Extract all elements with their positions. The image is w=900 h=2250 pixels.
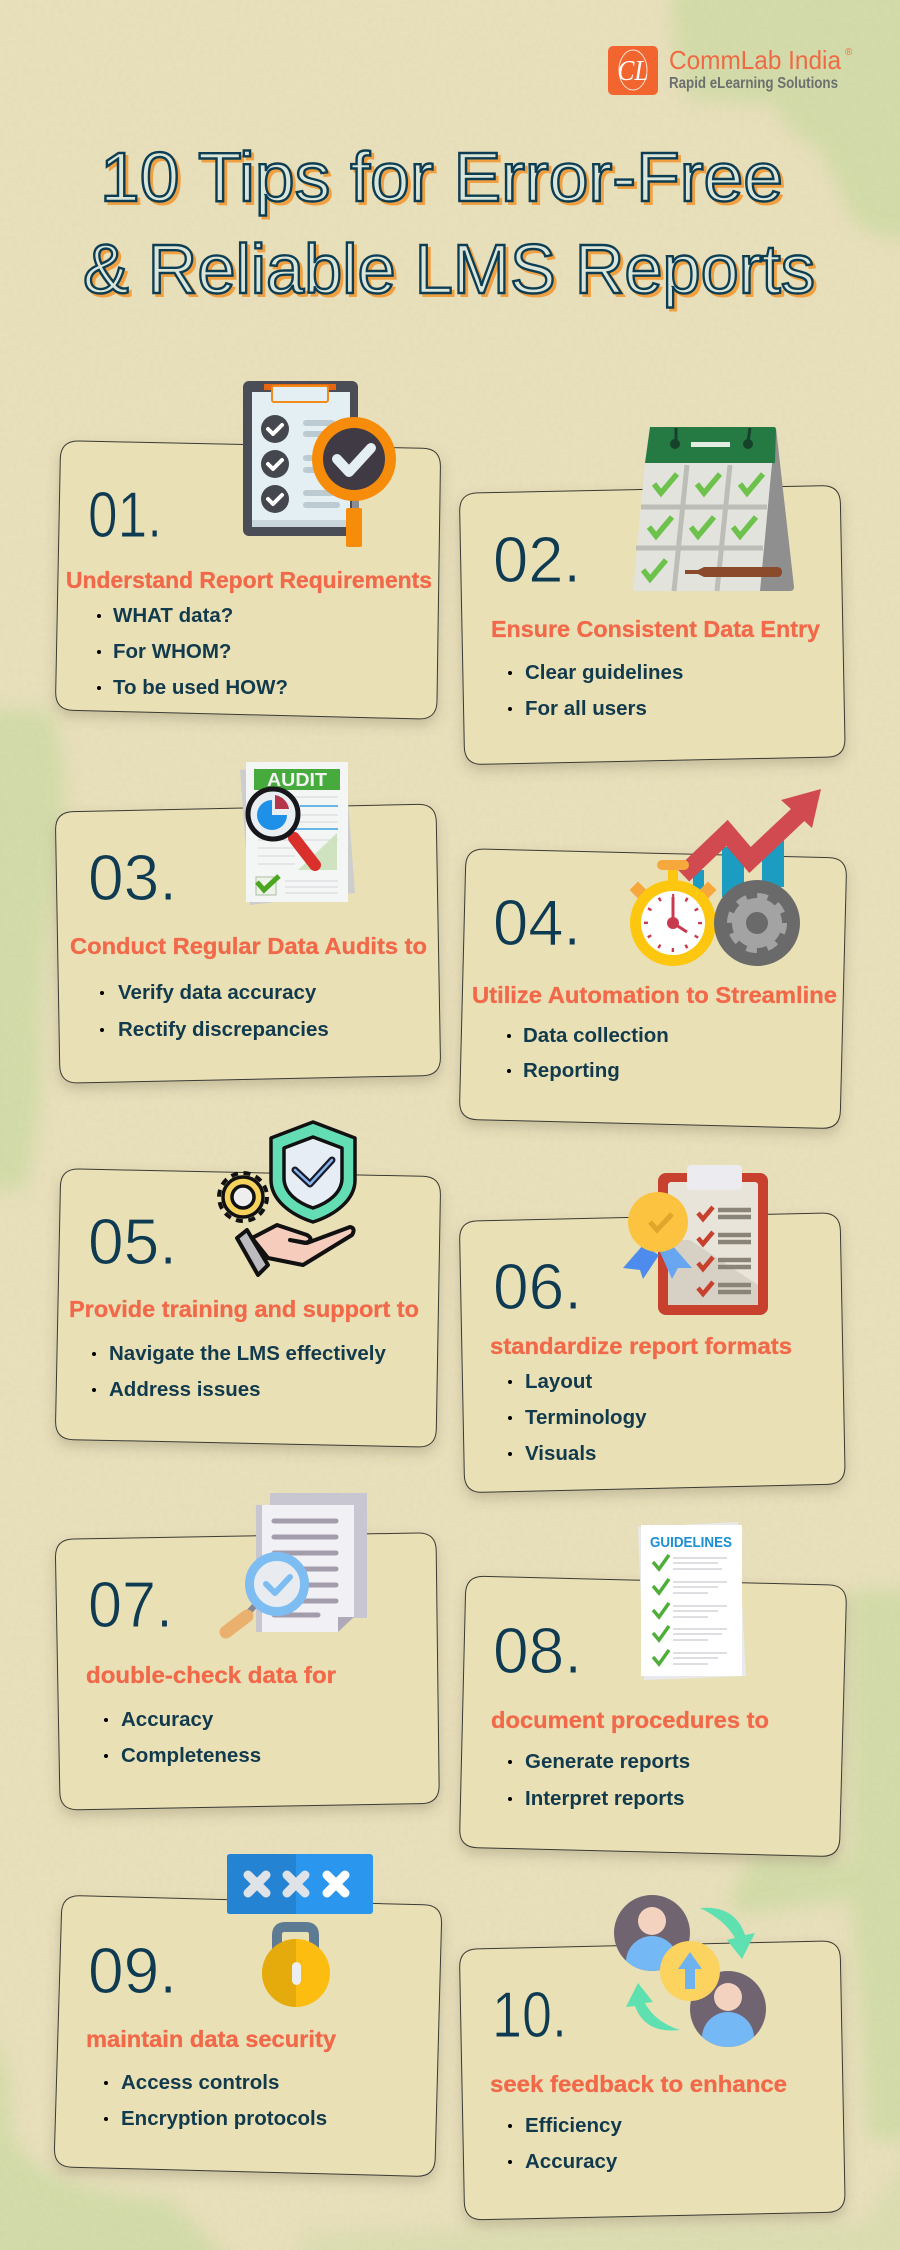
bullets 03 <box>100 981 329 1041</box>
icon: password field and padlock <box>227 1854 373 2007</box>
bullets 02: For all users <box>525 697 647 720</box>
title: 10 Tips for Error-Free <box>103 141 786 219</box>
bullets 09 <box>104 2071 327 2130</box>
icon: document with magnifier <box>226 1493 367 1632</box>
icon: checklist clipboard with medal <box>623 1165 768 1315</box>
bullets 09: Access controls <box>121 2071 279 2094</box>
bullets 07 <box>104 1708 261 1767</box>
heading 05: Provide training and support to <box>69 1296 419 1322</box>
icon: clipboard with magnifier <box>243 381 396 547</box>
heading 10: seek feedback to enhance <box>490 2071 787 2097</box>
number 03: 03. <box>88 841 177 914</box>
bullets 01: WHAT data? <box>113 604 233 627</box>
number 04: 04. <box>493 886 581 959</box>
bullets 09: Encryption protocols <box>121 2107 327 2130</box>
icon: feedback loop between two people <box>614 1895 766 2047</box>
panel: tip 10 <box>460 1895 845 2220</box>
bullets 05 <box>92 1342 386 1401</box>
bullets 01: To be used HOW? <box>113 676 288 699</box>
bullets 07: Completeness <box>121 1744 261 1767</box>
number 09: 09. <box>88 1934 177 2007</box>
icon: calendar with checks <box>633 427 794 591</box>
bullets 02: Clear guidelines <box>525 661 683 684</box>
heading 02: Ensure Consistent Data Entry <box>491 616 820 642</box>
bullets 04: Data collection <box>523 1024 669 1047</box>
icon: stopwatch, gear and growth chart <box>630 789 821 966</box>
bullets 08 <box>508 1750 690 1810</box>
panel: tip 08 <box>460 1522 846 1856</box>
logo: CommLab India: Rapid eLearning Solutions <box>669 75 838 92</box>
bullets 06: Layout <box>525 1370 592 1393</box>
bullets 01 <box>97 604 288 699</box>
title: & Reliable LMS Reports <box>86 233 818 311</box>
bullets 06: Terminology <box>525 1406 647 1429</box>
logo: CommLab India <box>608 45 853 95</box>
panel: tip 02 <box>460 427 845 764</box>
logo: CommLab India: CL <box>618 56 648 87</box>
panel: tip 06 <box>460 1165 845 1492</box>
heading 07: double-check data for <box>86 1662 336 1688</box>
bullets 04: Reporting <box>523 1059 620 1082</box>
icon: guidelines document <box>638 1522 746 1680</box>
bullets 05: Address issues <box>109 1378 261 1401</box>
heading 06: standardize report formats <box>490 1333 792 1359</box>
bullets 08: Interpret reports <box>525 1787 684 1810</box>
heading 08: document procedures to <box>491 1707 769 1733</box>
panel: tip 09 <box>54 1854 442 2176</box>
bullets 06: Visuals <box>525 1442 596 1465</box>
number 10: 10. <box>492 1978 567 2051</box>
number 01: 01. <box>88 478 162 551</box>
title: 10 Tips for Error-Free <box>100 138 783 216</box>
bullets 08: Generate reports <box>525 1750 690 1773</box>
bullets 04 <box>507 1024 669 1082</box>
bullets 03: Rectify discrepancies <box>118 1018 329 1041</box>
icon: hand with shield and gear <box>219 1122 355 1275</box>
icon: audit report with magnifier <box>240 762 355 905</box>
heading 01: Understand Report Requirements <box>66 567 432 593</box>
icon: audit report with magnifier: AUDIT <box>267 770 327 790</box>
panel: tip 04 <box>460 789 846 1128</box>
heading 04: Utilize Automation to Streamline <box>472 982 837 1008</box>
logo: CommLab India: CommLab India <box>669 45 841 75</box>
title: & Reliable LMS Reports <box>83 230 815 308</box>
number 02: 02. <box>493 523 581 596</box>
title <box>83 138 818 311</box>
number 08: 08. <box>493 1614 582 1687</box>
panel: tip 01 <box>56 381 440 719</box>
panel: tip 07 <box>55 1493 439 1810</box>
number 06: 06. <box>493 1250 582 1323</box>
heading 03: Conduct Regular Data Audits to <box>70 933 427 959</box>
icon: guidelines document: GUIDELINES <box>650 1534 732 1551</box>
bullets 02 <box>508 661 683 720</box>
heading 09: maintain data security <box>86 2026 336 2052</box>
number 07: 07. <box>88 1568 173 1641</box>
bullets 03: Verify data accuracy <box>118 981 317 1004</box>
number 05: 05. <box>88 1205 177 1278</box>
bullets 07: Accuracy <box>121 1708 214 1731</box>
bullets 10: Efficiency <box>525 2114 622 2137</box>
panel: tip 05 <box>56 1122 440 1447</box>
logo: CommLab India: ® <box>845 47 853 58</box>
bullets 05: Navigate the LMS effectively <box>109 1342 386 1365</box>
bullets 10: Accuracy <box>525 2150 618 2173</box>
panel: tip 03 <box>56 762 440 1083</box>
bullets 01: For WHOM? <box>113 640 231 663</box>
bullets 10 <box>508 2114 622 2173</box>
bullets 06 <box>508 1370 647 1465</box>
